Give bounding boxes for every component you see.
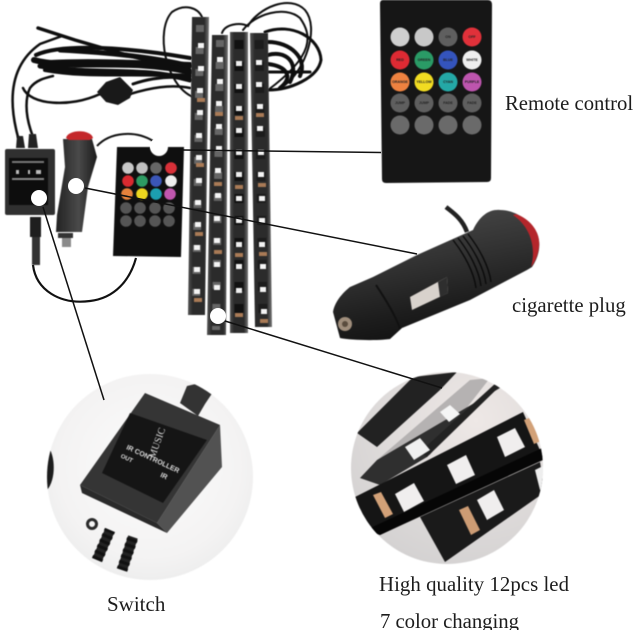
leader line: LED [225, 321, 442, 388]
front strip 2 [420, 462, 545, 562]
switch box text: OUT [119, 454, 134, 465]
marker dots [31, 138, 226, 324]
wire: controller to small remote [33, 258, 136, 302]
leader line: switch [43, 207, 104, 400]
wire connector [97, 77, 133, 105]
back strips [377, 378, 490, 460]
remote buttons: GREEN [418, 58, 431, 62]
label: high quality LED: High quality 12pcs led [379, 573, 570, 596]
circle: LED strip detail [351, 372, 548, 564]
remote buttons: PURPLE [465, 80, 480, 84]
switch box text [119, 426, 180, 481]
circle: switch detail [47, 374, 253, 580]
remote buttons: FADE [443, 101, 453, 105]
controller box (small) [5, 134, 55, 265]
remote buttons: ORANGE [392, 80, 408, 84]
small remote buttons [120, 162, 177, 227]
large cigarette plug [333, 207, 539, 340]
switch box text: IR [159, 472, 168, 481]
cigarette plug (small) [56, 131, 153, 247]
connector top [180, 383, 213, 416]
leader line: plug [85, 188, 417, 254]
strip 1 [188, 17, 209, 315]
remote buttons: BLUE [443, 58, 453, 62]
remote buttons: FADE [467, 101, 477, 105]
leader line: remote [183, 150, 381, 152]
small remote [113, 147, 184, 257]
remote buttons: YELLOW [416, 80, 432, 84]
remote buttons: CYAN [443, 80, 453, 84]
strip 2 [207, 35, 228, 335]
front strip 1 [355, 412, 543, 535]
LED strips [188, 17, 272, 335]
wire bundle [13, 3, 321, 137]
lower cables [97, 530, 133, 570]
remote buttons: OFF [468, 35, 476, 39]
remote buttons: JUMP [419, 101, 430, 105]
remote buttons: WHITE [466, 58, 478, 62]
large remote control [380, 0, 492, 183]
remote buttons: RED [396, 58, 404, 62]
label: cigarette plug: cigarette plug [512, 294, 626, 317]
remote buttons: JUMP [395, 101, 406, 105]
remote buttons: ON [445, 35, 451, 39]
strip 4 [250, 33, 272, 327]
label: switch: Switch [107, 592, 166, 616]
cable stub [47, 445, 54, 490]
switch box text: MUSIC [147, 426, 168, 460]
label: remote control: Remote control [505, 93, 633, 115]
remote buttons [390, 28, 482, 134]
switch box text: IR CONTROLLER [125, 444, 180, 475]
strip 3 [230, 32, 248, 333]
IR controller box [157, 425, 222, 533]
